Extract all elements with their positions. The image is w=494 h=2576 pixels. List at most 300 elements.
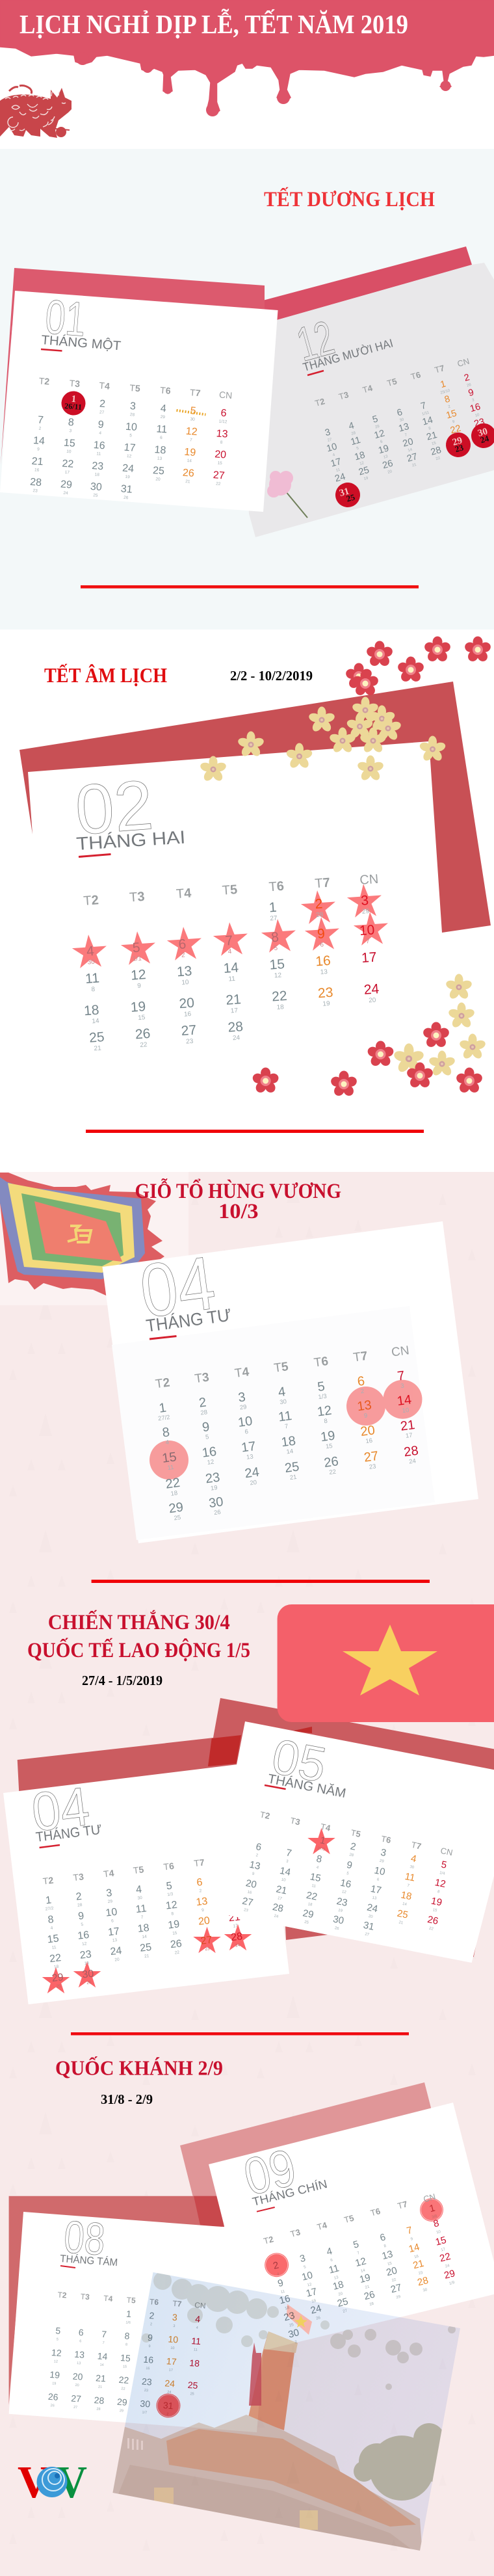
april date grid: T7 xyxy=(352,1349,369,1365)
december date grid: 29 xyxy=(375,425,380,430)
january date grid: 31 xyxy=(120,483,133,496)
may date grid: 7 xyxy=(285,1847,292,1859)
august date grid: 20 xyxy=(75,2383,79,2387)
september date grid: T3 xyxy=(289,2227,302,2239)
february date grid: 14 xyxy=(223,960,239,976)
april date grid: 15 xyxy=(47,1933,60,1945)
august date grid: 1 xyxy=(126,2309,132,2319)
february date grid: 14 xyxy=(92,1018,99,1025)
august date grid: 19 xyxy=(52,2382,57,2386)
january date grid: 22 xyxy=(62,458,74,470)
september date grid: 15 xyxy=(434,2235,447,2248)
month number 01: 01 xyxy=(44,289,88,347)
august date grid: 4 xyxy=(196,2326,198,2330)
september date grid: 14 xyxy=(408,2242,421,2255)
september date grid: 23 xyxy=(283,2310,296,2324)
september date grid: 9 xyxy=(276,2277,285,2289)
january date grid: 5 xyxy=(190,405,196,417)
february date grid: 5 xyxy=(132,940,140,955)
may date grid: 9 xyxy=(252,1872,255,1876)
may date grid: 25 xyxy=(396,1908,409,1921)
month number 04: 04 xyxy=(29,1775,93,1843)
april date grid: 17 xyxy=(405,1432,413,1440)
september date grid: 10 xyxy=(300,2270,314,2283)
september date grid: 1 xyxy=(428,2203,436,2214)
february date grid: 13 xyxy=(176,964,192,979)
april date grid: 13 xyxy=(246,1453,254,1461)
august date grid: 9 xyxy=(148,2344,151,2348)
august date grid: 2 xyxy=(150,2322,152,2327)
september date grid: 3/8 xyxy=(432,2214,438,2220)
august date grid: 19 xyxy=(49,2369,60,2380)
april date grid: 18 xyxy=(280,1434,296,1450)
february date grid: 29 xyxy=(362,908,370,916)
september date grid: 4 xyxy=(277,2272,280,2277)
april date grid: 15 xyxy=(172,1931,177,1936)
april date grid: 6 xyxy=(244,1428,249,1436)
may date grid: 5 xyxy=(346,1872,350,1876)
september date grid: CN xyxy=(422,2192,437,2204)
april date grid: 29 xyxy=(107,1899,113,1904)
april date grid: 22 xyxy=(174,1950,180,1956)
december date grid: 18 xyxy=(354,450,366,462)
april date grid: 21 xyxy=(228,1911,241,1924)
may date grid: 18 xyxy=(400,1889,413,1902)
month number 05: 05 xyxy=(268,1729,330,1793)
may date grid: 15 xyxy=(432,1908,437,1913)
january date grid: 19 xyxy=(184,447,196,458)
april date grid: 10 xyxy=(237,1414,254,1430)
may date grid: 18 xyxy=(307,1902,313,1907)
february date grid: 15 xyxy=(138,1014,146,1022)
icon: Vietnam flag xyxy=(278,1604,494,1722)
april date grid: 18 xyxy=(54,1965,59,1970)
september date grid: 12 xyxy=(307,2283,313,2287)
january date grid: T3 xyxy=(69,378,81,389)
february date grid: 15 xyxy=(269,957,285,973)
august date grid: 3 xyxy=(172,2312,178,2322)
april date grid: 2 xyxy=(198,1395,207,1411)
month number 09: 09 xyxy=(239,2138,302,2206)
april date grid: 26 xyxy=(213,1509,221,1517)
september date grid: 19 xyxy=(358,2272,372,2285)
may date grid: 3 xyxy=(380,1847,387,1859)
january date grid: 6 xyxy=(160,436,162,440)
august date grid: 23 xyxy=(144,2389,148,2393)
january date grid: 11 xyxy=(156,423,168,436)
may date grid: 25 xyxy=(304,1920,309,1925)
january date grid: 3 xyxy=(129,401,136,412)
august date grid: 7 xyxy=(101,2329,107,2339)
september date grid: 15 xyxy=(387,2261,393,2266)
april date grid: 7 xyxy=(284,1423,289,1431)
february date grid: 2 xyxy=(181,951,185,959)
may date grid: 11 xyxy=(404,1871,416,1884)
april date grid: 19 xyxy=(210,1484,218,1493)
april date grid: CN xyxy=(391,1344,410,1360)
april date grid: 16 xyxy=(77,1930,90,1942)
august date grid: 24 xyxy=(167,2391,172,2395)
holiday stars xyxy=(72,883,389,969)
april date grid: 12 xyxy=(165,1900,178,1912)
august date grid: 21 xyxy=(96,2372,107,2383)
date range: lunar new year: 2/2 - 10/2/2019 xyxy=(230,668,313,684)
january date grid: 16 xyxy=(93,440,105,451)
february date grid: 23 xyxy=(317,985,333,1001)
april date grid: 30 xyxy=(82,1968,94,1980)
may date grid: 12 xyxy=(341,1890,347,1895)
month name: THÁNG TÁM xyxy=(60,2252,118,2268)
april date grid: 11 xyxy=(278,1409,292,1425)
may date grid: 27 xyxy=(365,1932,370,1937)
december date grid: 17 xyxy=(330,457,343,470)
month name: THÁNG TƯ xyxy=(35,1822,103,1845)
december date grid: 12 xyxy=(373,428,386,441)
august date grid: T2 xyxy=(57,2290,67,2300)
january date grid: 30 xyxy=(90,481,102,493)
august date grid: 21 xyxy=(98,2385,102,2389)
april date grid: T7 xyxy=(193,1857,205,1868)
february date grid: 18 xyxy=(276,1003,285,1011)
january date grid: 7 xyxy=(37,414,44,426)
section background: new year panel xyxy=(0,149,494,630)
august date grid: T7 xyxy=(172,2299,182,2309)
april date grid: T2 xyxy=(155,1376,171,1391)
august date grid: 22 xyxy=(118,2374,129,2385)
january date grid: 30 xyxy=(190,417,195,422)
december date grid: 3 xyxy=(324,427,332,438)
january date grid: 15 xyxy=(217,461,222,466)
january date grid: 12 xyxy=(127,454,132,459)
february date grid: 4 xyxy=(86,944,95,959)
april date grid: 27/2 xyxy=(45,1906,54,1911)
april date grid: 8 xyxy=(324,1418,328,1425)
january date grid: 29 xyxy=(160,415,166,419)
december date grid: 21 xyxy=(425,430,438,443)
december date grid: 14 xyxy=(408,448,413,453)
april date grid: 28 xyxy=(403,1444,419,1459)
december date grid: 4 xyxy=(332,453,336,458)
may date grid: 19 xyxy=(430,1896,443,1908)
september date grid: 6 xyxy=(379,2231,387,2244)
main title: LỊCH NGHỈ DỊP LỄ, TẾT NĂM 2019 xyxy=(20,9,408,39)
september date grid: 2 xyxy=(294,2340,298,2344)
december date grid: 12 xyxy=(359,461,365,466)
august date grid: 12 xyxy=(54,2359,58,2364)
february date grid: 4 xyxy=(228,948,232,955)
december date grid: 10 xyxy=(474,413,480,418)
january date grid: 26 xyxy=(182,468,194,479)
february date grid: 8 xyxy=(270,930,280,945)
january date grid: 14 xyxy=(187,458,192,464)
january date grid: 24 xyxy=(122,463,135,475)
february date grid: 7 xyxy=(366,938,370,945)
april date grid: 25 xyxy=(56,1984,62,1989)
september date grid: 7 xyxy=(357,2251,360,2255)
august date grid: 14 xyxy=(97,2350,108,2362)
september date grid: 16 xyxy=(278,2293,291,2306)
month name: THÁNG MƯỜI HAI xyxy=(301,336,395,374)
calendar: august 2019 xyxy=(9,2211,273,2432)
calendar: december 2018 xyxy=(240,246,494,537)
april date grid: T3 xyxy=(73,1871,84,1883)
december date grid: 7 xyxy=(420,401,428,412)
highlight: 31 December: 31 xyxy=(338,486,350,499)
january date grid: T6 xyxy=(160,385,171,396)
january date grid: 13 xyxy=(216,428,228,440)
december date grid: 9 xyxy=(452,420,456,424)
april date grid: 14 xyxy=(286,1448,294,1456)
may date grid: T3 xyxy=(289,1816,301,1827)
january date grid: 11 xyxy=(96,451,101,457)
april date grid: 29 xyxy=(168,1500,184,1516)
april date grid: 27 xyxy=(363,1449,380,1465)
highlight: 30 December: 24 xyxy=(479,433,490,445)
may date grid: 8 xyxy=(315,1853,323,1865)
calendar: february 2019 xyxy=(20,682,491,1053)
april date grid: 8 xyxy=(171,1911,174,1917)
february date grid: 20 xyxy=(369,997,376,1004)
december date grid: 19 xyxy=(363,476,369,481)
september date grid: 23 xyxy=(418,2271,424,2276)
january date grid: 10 xyxy=(125,421,138,433)
september date grid: 18 xyxy=(285,2306,290,2311)
highlight: 30 December: 30 xyxy=(476,426,489,439)
february date grid: 27 xyxy=(270,915,278,922)
february date grid: 21 xyxy=(94,1044,102,1052)
april date grid: 2 xyxy=(75,1891,83,1903)
february date grid: 2 xyxy=(315,896,323,912)
april date grid: 7 xyxy=(396,1368,406,1384)
may date grid: 12 xyxy=(434,1877,447,1890)
january date grid: 18 xyxy=(154,444,166,457)
january date grid: 3 xyxy=(69,429,72,433)
april date grid: 12 xyxy=(317,1403,333,1420)
april date grid: 24 xyxy=(244,1465,260,1481)
may date grid: 4 xyxy=(316,1866,319,1870)
january date grid: 14 xyxy=(32,435,46,447)
may date grid: 22 xyxy=(428,1927,434,1932)
month number 04: 04 xyxy=(135,1240,220,1334)
february date grid: 28 xyxy=(228,1019,244,1035)
february date grid: 5 xyxy=(274,945,278,952)
august date grid: 14 xyxy=(99,2363,104,2367)
august date grid: 15 xyxy=(123,2365,127,2369)
may date grid: 16 xyxy=(339,1878,352,1891)
january date grid: 27 xyxy=(213,470,225,482)
april date grid: 24 xyxy=(409,1457,417,1466)
january date grid: T2 xyxy=(38,375,50,387)
april date grid: 1 xyxy=(45,1894,52,1906)
december date grid: T5 xyxy=(386,376,398,388)
august date grid: 20 xyxy=(72,2371,83,2382)
april date grid: 25 xyxy=(284,1459,300,1476)
august date grid: 8 xyxy=(125,2343,127,2347)
december date grid: 27 xyxy=(327,438,333,443)
september date grid: 13 xyxy=(333,2276,339,2281)
decoration: red and yellow blossoms xyxy=(199,636,492,1098)
april date grid: 6 xyxy=(196,1877,203,1889)
february date grid: 25 xyxy=(88,1029,105,1046)
february date grid: 24 xyxy=(233,1034,240,1042)
may date grid: 6 xyxy=(376,1878,380,1882)
december date grid: CN xyxy=(456,356,471,369)
september date grid: 24 xyxy=(309,2303,322,2317)
august date grid: 17 xyxy=(166,2356,177,2367)
august date grid: 3 xyxy=(173,2324,176,2328)
highlight: 1 January: 26/11 xyxy=(64,401,82,412)
december date grid: 5 xyxy=(356,447,359,451)
february date grid: CN xyxy=(359,872,379,888)
september date grid: 5 xyxy=(304,2265,307,2270)
august date grid: 29 xyxy=(120,2409,124,2413)
september date grid: 14 xyxy=(360,2268,366,2274)
december date grid: 15 xyxy=(445,408,458,421)
april date grid: 13 xyxy=(112,1938,118,1943)
date range: national day: 31/8 - 2/9 xyxy=(101,2091,153,2107)
january date grid: 13 xyxy=(157,457,162,461)
april date grid: 24 xyxy=(110,1945,122,1958)
may date grid: 27/3 xyxy=(317,1847,326,1852)
april date grid: 19 xyxy=(84,1961,90,1966)
january date grid: 27 xyxy=(99,410,105,415)
august date grid: 30 xyxy=(140,2398,151,2410)
april date grid: 16 xyxy=(365,1437,373,1445)
august date grid: 31 xyxy=(162,2400,174,2411)
heading: Gio To Hung Vuong: GIỖ TỔ HÙNG VƯƠNG xyxy=(135,1177,341,1203)
may date grid: 16 xyxy=(247,1891,252,1895)
september date grid: 11 xyxy=(328,2263,341,2276)
may date grid: T6 xyxy=(380,1834,392,1845)
april date grid: 19 xyxy=(168,1919,180,1931)
december date grid: 7 xyxy=(404,433,408,438)
february date grid: 1/1 xyxy=(133,955,142,963)
may date grid: 29 xyxy=(302,1907,315,1920)
section background: white top xyxy=(0,0,494,149)
april date grid: 15 xyxy=(161,1450,177,1466)
august date grid: 16 xyxy=(143,2354,154,2365)
april date grid: 18 xyxy=(137,1922,150,1935)
february date grid: 30 xyxy=(87,959,96,966)
april date grid: 23 xyxy=(205,1946,210,1952)
september date grid: 8 xyxy=(384,2244,387,2249)
april date grid: 26 xyxy=(323,1454,339,1470)
april date grid: 27 xyxy=(200,1935,213,1947)
april date grid: 1/3 xyxy=(167,1892,174,1897)
april date grid: 20 xyxy=(359,1423,376,1439)
april date grid: 11 xyxy=(51,1945,57,1950)
january date grid: T4 xyxy=(99,380,110,392)
december date grid: T7 xyxy=(434,363,446,375)
april date grid: T5 xyxy=(133,1864,144,1876)
december date grid: 4 xyxy=(348,421,356,432)
december date grid: 26 xyxy=(467,383,472,388)
calendar: september 2019 xyxy=(209,2103,494,2352)
month name: THÁNG TƯ xyxy=(145,1305,233,1336)
february date grid: 17 xyxy=(230,1007,239,1015)
january date grid: 18 xyxy=(94,472,100,477)
august date grid: 1/7 xyxy=(142,2411,147,2415)
january date grid: T7 xyxy=(190,387,201,398)
february date grid: T6 xyxy=(268,879,285,894)
april date grid: 15 xyxy=(325,1442,333,1450)
september date grid: 5 xyxy=(352,2238,360,2251)
may date grid: 4 xyxy=(410,1853,417,1865)
highlight: 31 December: 25 xyxy=(345,492,356,503)
april date grid: 28 xyxy=(77,1903,83,1908)
december date grid: 25 xyxy=(358,465,370,478)
september date grid: 28 xyxy=(416,2275,430,2289)
december date grid: 13 xyxy=(397,421,410,434)
may date grid: 8 xyxy=(437,1890,441,1894)
december date grid: T4 xyxy=(361,383,374,395)
august date grid: 27 xyxy=(71,2393,82,2404)
january date grid: 8 xyxy=(68,417,74,429)
may date grid: 26 xyxy=(426,1914,439,1927)
april date grid: 6 xyxy=(357,1374,365,1389)
december date grid: 10 xyxy=(326,442,338,454)
august date grid: 27 xyxy=(73,2406,77,2410)
september date grid: T5 xyxy=(343,2213,355,2225)
highlighted holiday circles xyxy=(150,1380,422,1480)
may date grid: 28 xyxy=(272,1902,284,1915)
january date grid: 28 xyxy=(130,412,135,418)
january date grid: 2 xyxy=(99,399,106,410)
september date grid: 16 xyxy=(414,2255,419,2259)
september date grid: 1/9 xyxy=(448,2281,456,2286)
highlight: 31 December xyxy=(333,480,363,510)
february date grid: 19 xyxy=(130,999,146,1015)
january date grid: 20 xyxy=(155,477,161,482)
april date grid: 6 xyxy=(111,1919,114,1924)
january date grid: 23 xyxy=(92,460,104,472)
december date grid: 2 xyxy=(448,405,451,409)
december date grid: 27 xyxy=(406,451,419,464)
february date grid: T2 xyxy=(83,893,99,909)
april date grid xyxy=(151,1344,428,1522)
may date grid: 30 xyxy=(410,1865,415,1870)
may date grid: 21 xyxy=(275,1883,288,1896)
august date grid: CN xyxy=(194,2300,206,2311)
april date grid: T6 xyxy=(313,1355,329,1370)
august date grid: 10 xyxy=(170,2346,175,2350)
september date grid: T4 xyxy=(316,2220,328,2232)
december date grid: 2 xyxy=(463,372,471,384)
april date grid: 21 xyxy=(400,1418,416,1434)
may date grid: 23 xyxy=(243,1908,249,1913)
september date grid: 25 xyxy=(336,2296,349,2309)
december date grid: 26 xyxy=(382,458,395,471)
september date grid: 2 xyxy=(272,2260,280,2272)
may date grid: 19 xyxy=(338,1909,343,1913)
september date grid: 21 xyxy=(365,2285,370,2290)
january date grid: 7 xyxy=(190,438,192,443)
august date grid: 8 xyxy=(124,2330,130,2341)
april date grid: 1/3 xyxy=(318,1393,327,1401)
may date grid: 22 xyxy=(306,1890,318,1903)
may date grid: 28 xyxy=(349,1853,354,1858)
september date grid: 17 xyxy=(305,2286,318,2300)
april date grid: T6 xyxy=(163,1861,175,1872)
september date grid: 9 xyxy=(410,2237,414,2242)
february date grid: 20 xyxy=(179,996,195,1011)
header banner with paint drips xyxy=(0,0,494,116)
december date grid: 5 xyxy=(371,414,379,425)
january date grid: 4 xyxy=(99,431,102,436)
september date grid: 8 xyxy=(432,2218,440,2229)
april date grid: 9 xyxy=(77,1911,84,1922)
september date grid: 11 xyxy=(280,2290,286,2294)
